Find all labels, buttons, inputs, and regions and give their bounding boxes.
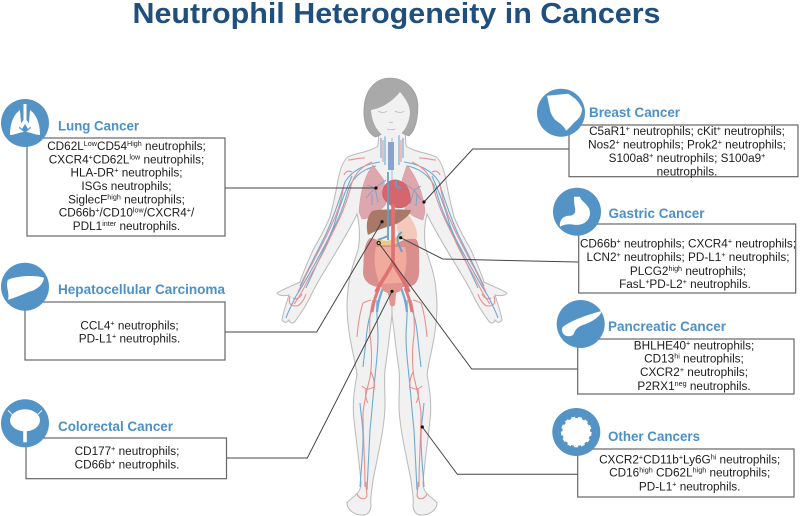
- hair back: [364, 78, 418, 137]
- lung neutrophil list: HLA-DR+ neutrophils;: [71, 165, 182, 180]
- icon: bladder: [1, 399, 49, 447]
- panel: colorectal cancer: [1, 399, 226, 479]
- hepatocellular text box: [25, 302, 225, 360]
- lung neutrophil list: ISGs neutrophils;: [81, 180, 172, 193]
- breast heading: Breast Cancer: [589, 104, 681, 120]
- lung neutrophil list: CD66b+/CD10low/CXCR4+/: [59, 205, 195, 220]
- body right half: [392, 130, 507, 515]
- icon: liver: [1, 263, 49, 311]
- breast text box: [569, 125, 798, 177]
- other cancers neutrophil list: CXCR2+CD11b+Ly6Ghi neutrophils;: [599, 452, 780, 466]
- breast neutrophil list: Nos2+ neutrophils; Prok2+ neutrophils;: [588, 137, 786, 151]
- small intestine: [375, 247, 406, 284]
- pancreatic neutrophil list: CD13hi neutrophils;: [644, 351, 744, 366]
- gastric neutrophil list: PLCG2high neutrophils;: [630, 264, 746, 278]
- gastric neutrophil list: LCN2+ neutrophils; PD-L1+ neutrophils;: [586, 250, 790, 264]
- trachea: [388, 142, 394, 170]
- hepatocellular neutrophil list: CCL4+ neutrophils;: [80, 318, 179, 332]
- vena cava: [378, 172, 402, 252]
- colorectal neutrophil list: CD66b+ neutrophils.: [75, 457, 179, 471]
- bronchi: [366, 180, 421, 206]
- connector: lung: [225, 186, 378, 190]
- colorectal text box: [26, 438, 226, 479]
- aorta: [376, 204, 409, 292]
- other cancers neutrophil list: [599, 452, 780, 494]
- icon: lungs: [1, 99, 49, 147]
- icon: tumor cell: [552, 408, 600, 456]
- colorectal neutrophil list: CD177+ neutrophils;: [75, 444, 179, 458]
- connector: colorectal: [226, 290, 394, 458]
- pancreatic neutrophil list: CXCR2+ neutrophils;: [640, 364, 748, 379]
- panel: other cancers: [552, 408, 794, 497]
- colorectal neutrophil list: [75, 444, 179, 471]
- other cancers neutrophil list: PD-L1+ neutrophils.: [639, 479, 740, 494]
- breast neutrophil list: C5aR1+ neutrophils; cKit+ neutrophils;: [589, 124, 785, 138]
- panel: lung cancer: [1, 99, 225, 236]
- breast neutrophil list: S100a8+ neutrophils; S100a9+: [609, 150, 765, 165]
- hepatocellular neutrophil list: PD-L1+ neutrophils.: [79, 331, 180, 346]
- lung heading: Lung Cancer: [58, 118, 140, 134]
- other cancers neutrophil list: CD16high CD62Lhigh neutrophils;: [609, 465, 770, 480]
- pancreas: [377, 234, 406, 245]
- panel: pancreatic cancer: [557, 300, 794, 394]
- colorectal heading: Colorectal Cancer: [58, 418, 174, 434]
- gastric text box: [579, 224, 796, 293]
- right lung: [402, 165, 425, 220]
- lung neutrophil list: [47, 138, 206, 233]
- lung text box: [27, 138, 225, 236]
- gastric heading: Gastric Cancer: [608, 205, 705, 221]
- heart: [383, 180, 410, 208]
- face: [371, 92, 410, 138]
- pancreatic neutrophil list: P2RX1neg neutrophils.: [637, 378, 751, 393]
- body left half: [277, 130, 392, 515]
- other cancers text box: [578, 449, 794, 497]
- pancreatic heading: Pancreatic Cancer: [608, 318, 727, 334]
- breast neutrophil list: [588, 124, 786, 179]
- other cancers heading: Other Cancers: [608, 428, 700, 444]
- pelvic organs: [381, 284, 402, 306]
- lung neutrophil list: CD62LLowCD54High neutrophils;: [47, 138, 206, 153]
- panel: breast cancer: [537, 89, 798, 179]
- lung neutrophil list: CXCR4+CD62Llow neutrophils;: [49, 152, 204, 166]
- left lung: [359, 165, 386, 219]
- gastric neutrophil list: FasL+PD-L2+ neutrophils.: [619, 276, 751, 291]
- connector: gastric: [399, 236, 578, 262]
- connector: pancreatic: [377, 241, 578, 369]
- hepatocellular neutrophil list: [79, 318, 180, 346]
- pancreatic text box: [578, 339, 794, 394]
- liver: [367, 209, 411, 235]
- pancreatic neutrophil list: [634, 338, 754, 393]
- panel: hepatocellular carcinoma: [1, 263, 225, 360]
- connector: hepatocellular carcinoma: [225, 220, 384, 332]
- lung neutrophil list: SiglecFhigh neutrophils;: [68, 192, 185, 206]
- panel: gastric cancer: [553, 188, 796, 293]
- pancreatic neutrophil list: BHLHE40+ neutrophils;: [634, 338, 754, 352]
- gastric neutrophil list: [580, 236, 796, 291]
- connector: breast: [422, 149, 569, 204]
- lung neutrophil list: PDL1inter neutrophils.: [73, 218, 180, 233]
- icon: pancreas: [557, 300, 605, 348]
- breast neutrophil list: neutrophils.: [657, 166, 717, 179]
- stomach: [396, 214, 417, 240]
- icon: breast: [537, 89, 585, 137]
- closed eyes and mouth: [378, 111, 404, 130]
- connector: other cancers: [421, 425, 578, 474]
- gastric neutrophil list: CD66b+ neutrophils; CXCR4+ neutrophils;: [580, 236, 796, 251]
- hepatocellular heading: Hepatocellular Carcinoma: [58, 281, 225, 297]
- human body illustration: [277, 78, 507, 515]
- icon: stomach: [553, 188, 601, 236]
- large intestine: [363, 238, 419, 287]
